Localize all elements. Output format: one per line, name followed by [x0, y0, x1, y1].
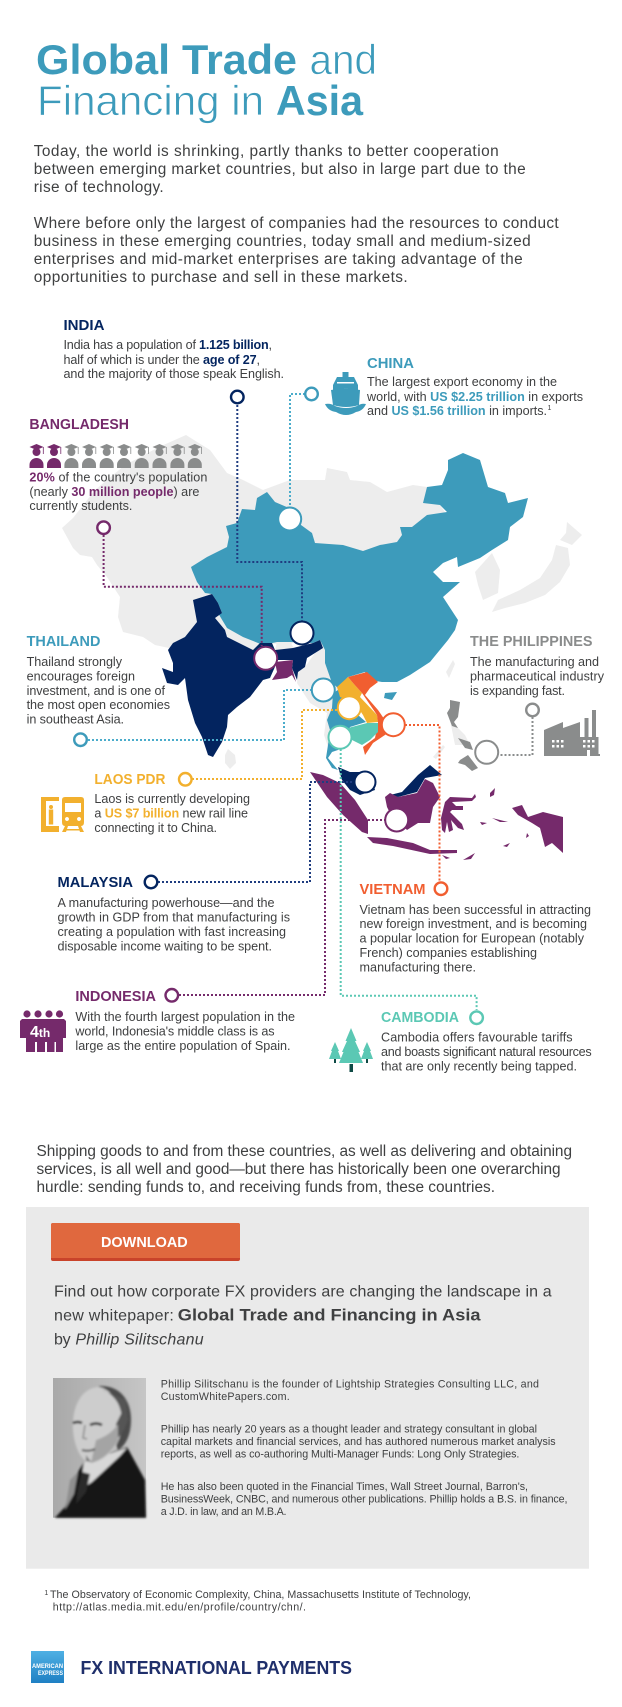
text: shipping paragraph: Shipping goods to and from these countries, as well as delivering and obtaining: [36, 1143, 572, 1160]
text: Vietnam: new foreign investment, and is becoming: [360, 917, 587, 931]
icon row: students: [30, 444, 202, 468]
panel: download: [26, 1207, 589, 1569]
photo: author portrait: [53, 1378, 146, 1518]
text: Cambodia: Cambodia offers favourable tariffs: [381, 1031, 573, 1045]
text: Thailand: Thailand strongly: [27, 655, 123, 669]
text: Cambodia: that are only recently being tapped.: [381, 1060, 577, 1074]
text: Cambodia: [381, 1031, 592, 1074]
panel: The Philippines: [470, 634, 605, 756]
intro text: business in these emerging countries, today small and medium-sized: [34, 233, 531, 250]
text: Indonesia: With the fourth largest population in the: [75, 1010, 295, 1024]
text: whitepaper promo: new whitepaper:: [54, 1308, 174, 1325]
footnote: [44, 1589, 471, 1614]
icon: people with 4th: [20, 1010, 66, 1052]
marker: China: [305, 388, 318, 400]
text: Indonesia: large as the entire population of Spain.: [75, 1039, 291, 1053]
intro text: Where before only the largest of companies had the resources to conduct: [34, 215, 559, 232]
panel: Indonesia: [20, 989, 295, 1053]
text: Vietnam: a popular location for European (notably: [360, 932, 585, 946]
marker: Bangladesh: [97, 521, 110, 534]
intro text: opportunities to purchase and sell in these markets.: [34, 269, 408, 286]
text: China: world, with US $2.25 trillion in exports: [366, 390, 583, 404]
button: download: DOWNLOAD: [101, 1235, 188, 1251]
text: The Philippines: [470, 655, 605, 698]
marker: India: [231, 391, 244, 403]
text: whitepaper promo: Phillip Silitschanu: [75, 1332, 204, 1349]
heading: China: CHINA: [367, 356, 415, 372]
map: Laos: [337, 677, 378, 723]
text: Thailand: encourages foreign: [27, 670, 135, 684]
text: author biography: CustomWhitePapers.com.: [161, 1391, 290, 1403]
panel: Laos PDR: [41, 772, 250, 835]
title: Financing in: [37, 77, 264, 124]
title: and: [310, 36, 377, 83]
intro text: between emerging market countries, but also in large part due to the: [34, 161, 526, 178]
marker: Thailand: [74, 733, 87, 746]
heading: Cambodia: CAMBODIA: [381, 1010, 460, 1026]
text: India: [64, 338, 284, 381]
panel: India: [64, 318, 284, 403]
panel: China: [305, 356, 583, 418]
marker: Laos PDR: [179, 773, 192, 786]
icon: train station: [41, 797, 84, 832]
heading: Vietnam: VIETNAM: [360, 882, 426, 898]
connector: Indonesia: [179, 808, 408, 995]
text: Indonesia: [74, 1010, 295, 1053]
map: Thailand: [326, 690, 366, 770]
connector: Bangladesh: [104, 535, 277, 670]
intro text: Today, the world is shrinking, partly thanks to better cooperation: [34, 143, 499, 160]
text: Laos PDR: a US $7 billion new rail line: [94, 807, 248, 821]
map: Bangladesh: [272, 660, 296, 682]
connector: China: [278, 394, 305, 530]
text: China: 1: [548, 405, 552, 412]
marker: The Philippines: [526, 704, 539, 716]
logo: American Express: EXPRESS: [38, 1670, 63, 1677]
brand name: FX INTERNATIONAL PAYMENTS: [80, 1657, 352, 1678]
text: Thailand: the most open economies: [27, 698, 170, 712]
text: Vietnam: [360, 903, 591, 975]
intro text: rise of technology.: [34, 179, 164, 196]
text: Cambodia: and boasts significant natural resources: [381, 1045, 592, 1059]
panel: Bangladesh: [29, 417, 207, 534]
intro text: enterprises and mid-market enterprises are taking advantage of the: [34, 251, 523, 268]
text: Thailand: investment, and is one of: [27, 684, 165, 698]
text: author biography: a J.D. in law, and an M.B.A.: [161, 1506, 286, 1518]
text: The Philippines: The manufacturing and: [470, 655, 599, 669]
heading: Thailand: THAILAND: [27, 634, 100, 650]
map: Vietnam: [348, 672, 388, 755]
heading: India: INDIA: [64, 318, 105, 334]
text: Malaysia: [58, 896, 290, 954]
text: India: half of which is under the age of 27,: [64, 353, 260, 367]
text: Vietnam: Vietnam has been successful in attracting: [360, 903, 591, 917]
map: The Philippines: [447, 700, 478, 771]
marker: Malaysia: [145, 876, 157, 888]
text: India: and the majority of those speak English.: [64, 367, 284, 381]
text: author biography: Phillip has nearly 20 years as a thought leader and strategy consultant in global: [161, 1424, 537, 1436]
connector: Thailand: [88, 678, 335, 740]
map: China: [191, 453, 528, 688]
heading: The Philippines: THE PHILIPPINES: [470, 634, 593, 650]
heading: Laos PDR: LAOS PDR: [94, 772, 166, 788]
text: shipping paragraph: [36, 1143, 572, 1196]
text: author biography: capital markets and financial services, and has authored numerous market analysis: [161, 1436, 556, 1448]
map of Asia: [62, 435, 582, 860]
logo: American Express: AMERICAN: [32, 1663, 63, 1670]
marker: Vietnam: [435, 882, 447, 895]
text: author biography: He has also been quoted in the Financial Times, Wall Street Journal, Barron's,: [161, 1481, 528, 1493]
map: Malaysia: [338, 765, 442, 797]
text: Laos PDR: connecting it to China.: [94, 821, 217, 835]
text: Malaysia: creating a population with fast increasing: [58, 925, 286, 939]
panel: Malaysia: [58, 875, 290, 954]
text: The Philippines: pharmaceutical industry: [470, 670, 605, 684]
heading: Malaysia: MALAYSIA: [58, 875, 134, 891]
intro text: [34, 143, 559, 286]
title: Global Trade: [36, 36, 297, 83]
heading: Indonesia: INDONESIA: [75, 989, 157, 1005]
icon: ship: [325, 372, 366, 415]
panel: Vietnam: [360, 882, 591, 975]
text: whitepaper promo: by: [54, 1332, 71, 1349]
text: The Philippines: is expanding fast.: [470, 684, 565, 698]
text: author biography: [161, 1379, 568, 1518]
icon: trees: [329, 1028, 373, 1072]
text: Bangladesh: [29, 471, 207, 513]
marker: Indonesia: [166, 989, 178, 1002]
text: China: The largest export economy in the: [367, 375, 557, 389]
connector: Laos: [192, 696, 361, 779]
title: Asia: [276, 77, 364, 124]
icon: people with 4th: 4th: [30, 1024, 50, 1041]
text: Malaysia: disposable income waiting to be spent.: [58, 940, 272, 954]
map: India: [162, 594, 323, 757]
icon: factory: [544, 710, 600, 756]
text: India: India has a population of 1.125 billion,: [64, 338, 272, 352]
text: Vietnam: manufacturing there.: [360, 961, 476, 975]
text: whitepaper promo: [54, 1284, 552, 1349]
text: Malaysia: A manufacturing powerhouse—and the: [58, 896, 274, 910]
logo: American Express: [31, 1651, 64, 1683]
panel: Cambodia: [329, 1010, 592, 1074]
text: author biography: reports, as well as co-authoring Multi-Manager Funds: Long Only Strategies.: [161, 1449, 519, 1461]
text: Vietnam: French) companies establishing: [360, 946, 537, 960]
text: Bangladesh: currently students.: [29, 499, 132, 513]
text: whitepaper promo: Find out how corporate FX providers are changing the landscape in a: [54, 1284, 552, 1301]
panel: Thailand: [27, 634, 170, 746]
connector: India: [237, 405, 314, 644]
connector: Cambodia: [328, 726, 477, 1010]
heading: Bangladesh: BANGLADESH: [29, 417, 129, 433]
connector: The Philippines: [475, 717, 532, 764]
text: Bangladesh: 20% of the country's population: [29, 471, 207, 485]
text: author biography: BusinessWeek, CNBC, and numerous other publications. Phillip holds a B.S. in finance,: [161, 1494, 568, 1506]
connector: Malaysia: [158, 772, 376, 882]
map: Indonesia: [310, 772, 563, 860]
text: Thailand: [27, 655, 170, 727]
button: download: [51, 1223, 240, 1261]
footnote: http://atlas.media.mit.edu/en/profile/country/chn/.: [53, 1602, 306, 1614]
text: China: [366, 375, 583, 418]
text: China: and US $1.56 trillion in imports.: [367, 404, 547, 418]
map: Hainan: [384, 692, 397, 700]
map: surrounding land in grey: [62, 435, 582, 769]
text: Laos PDR: [94, 792, 250, 835]
title: [36, 36, 377, 124]
text: Thailand: in southeast Asia.: [27, 713, 124, 727]
connector: Vietnam: [382, 713, 440, 881]
text: Indonesia: world, Indonesia's middle class is as: [74, 1025, 275, 1039]
text: Laos PDR: Laos is currently developing: [94, 792, 250, 806]
text: Malaysia: growth in GDP from that manufacturing is: [58, 911, 290, 925]
text: shipping paragraph: services, is all well and good—but there has historically been one overarching: [36, 1161, 560, 1178]
marker: Cambodia: [470, 1011, 483, 1024]
text: Bangladesh: (nearly 30 million people) are: [29, 485, 199, 499]
footnote: The Observatory of Economic Complexity, China, Massachusetts Institute of Technology,: [50, 1589, 471, 1601]
map: Cambodia: [348, 723, 378, 745]
footnote: 1: [44, 1590, 48, 1597]
text: shipping paragraph: hurdle: sending funds to, and receiving funds from, these countries.: [36, 1179, 495, 1196]
text: author biography: Phillip Silitschanu is the founder of Lightship Strategies Consulting LLC, and: [161, 1379, 539, 1391]
text: whitepaper promo: Global Trade and Financing in Asia: [178, 1306, 481, 1325]
